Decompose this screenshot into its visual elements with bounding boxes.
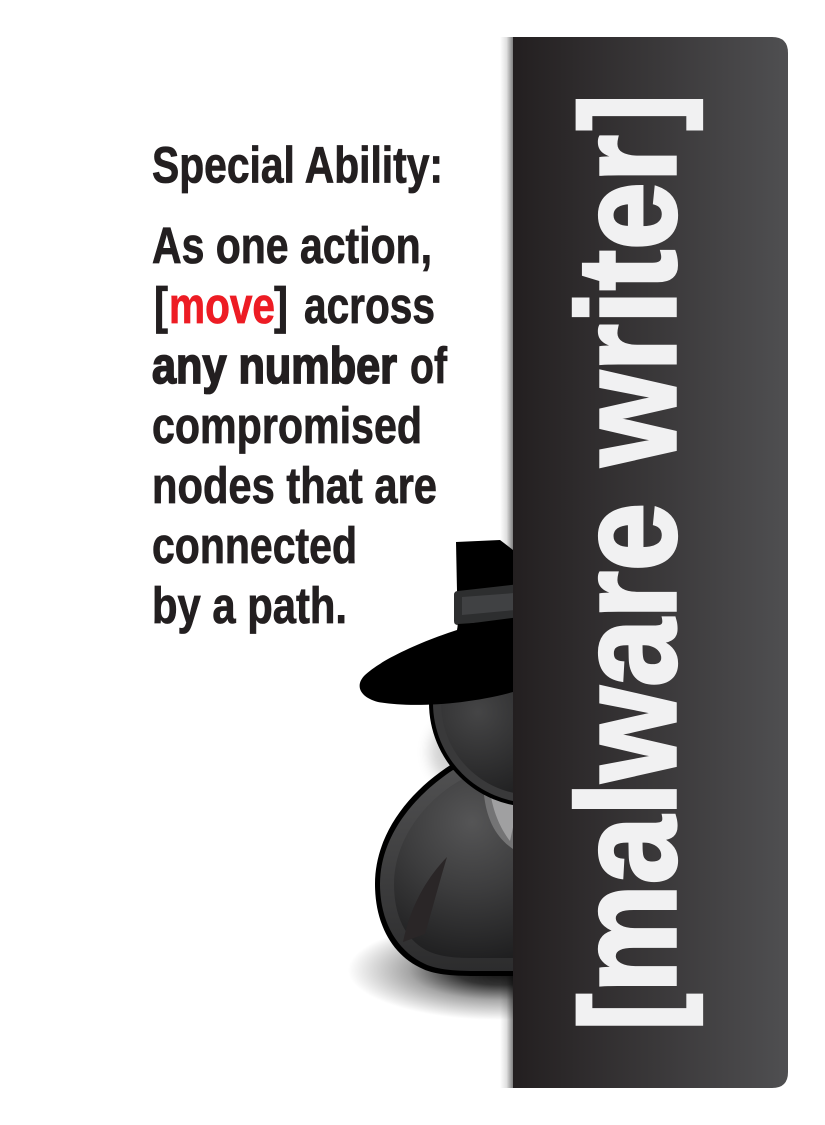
vertical title: [: [554, 994, 702, 1030]
special ability description: nodes that are: [152, 457, 437, 514]
vertical title: [548, 95, 705, 1030]
special ability heading: Special Ability:: [152, 136, 443, 194]
hat brim: [360, 620, 520, 705]
figure body: [375, 764, 520, 976]
vertical title: writer: [548, 135, 705, 467]
special ability description: compromised: [152, 397, 422, 454]
figure head: [429, 692, 513, 805]
body crease highlight: [403, 857, 447, 942]
head shadow on background: [424, 729, 450, 777]
malware writer role card: [152, 37, 788, 1088]
special ability description: across: [304, 277, 435, 334]
special ability description: of: [410, 337, 448, 394]
special ability description: As one action,: [152, 217, 432, 274]
special ability description: by a path.: [152, 577, 347, 634]
collar highlight: [484, 795, 513, 849]
icon: figure in a hat peeking from behind the panel: [354, 540, 513, 1018]
ground shadow: [354, 939, 513, 1018]
special ability description: any number: [152, 337, 397, 394]
vertical title: ]: [555, 95, 702, 130]
vertical title: malware: [548, 503, 705, 993]
panel edge shadow: [500, 37, 513, 1088]
special ability description: [: [154, 277, 168, 334]
hat band: [454, 584, 513, 625]
special ability description: move: [169, 277, 275, 334]
dark title panel: [513, 37, 788, 1088]
special ability description: [152, 217, 448, 634]
hat crown: [456, 540, 513, 627]
special ability description: connected: [152, 517, 357, 574]
special ability description: ]: [274, 277, 288, 334]
